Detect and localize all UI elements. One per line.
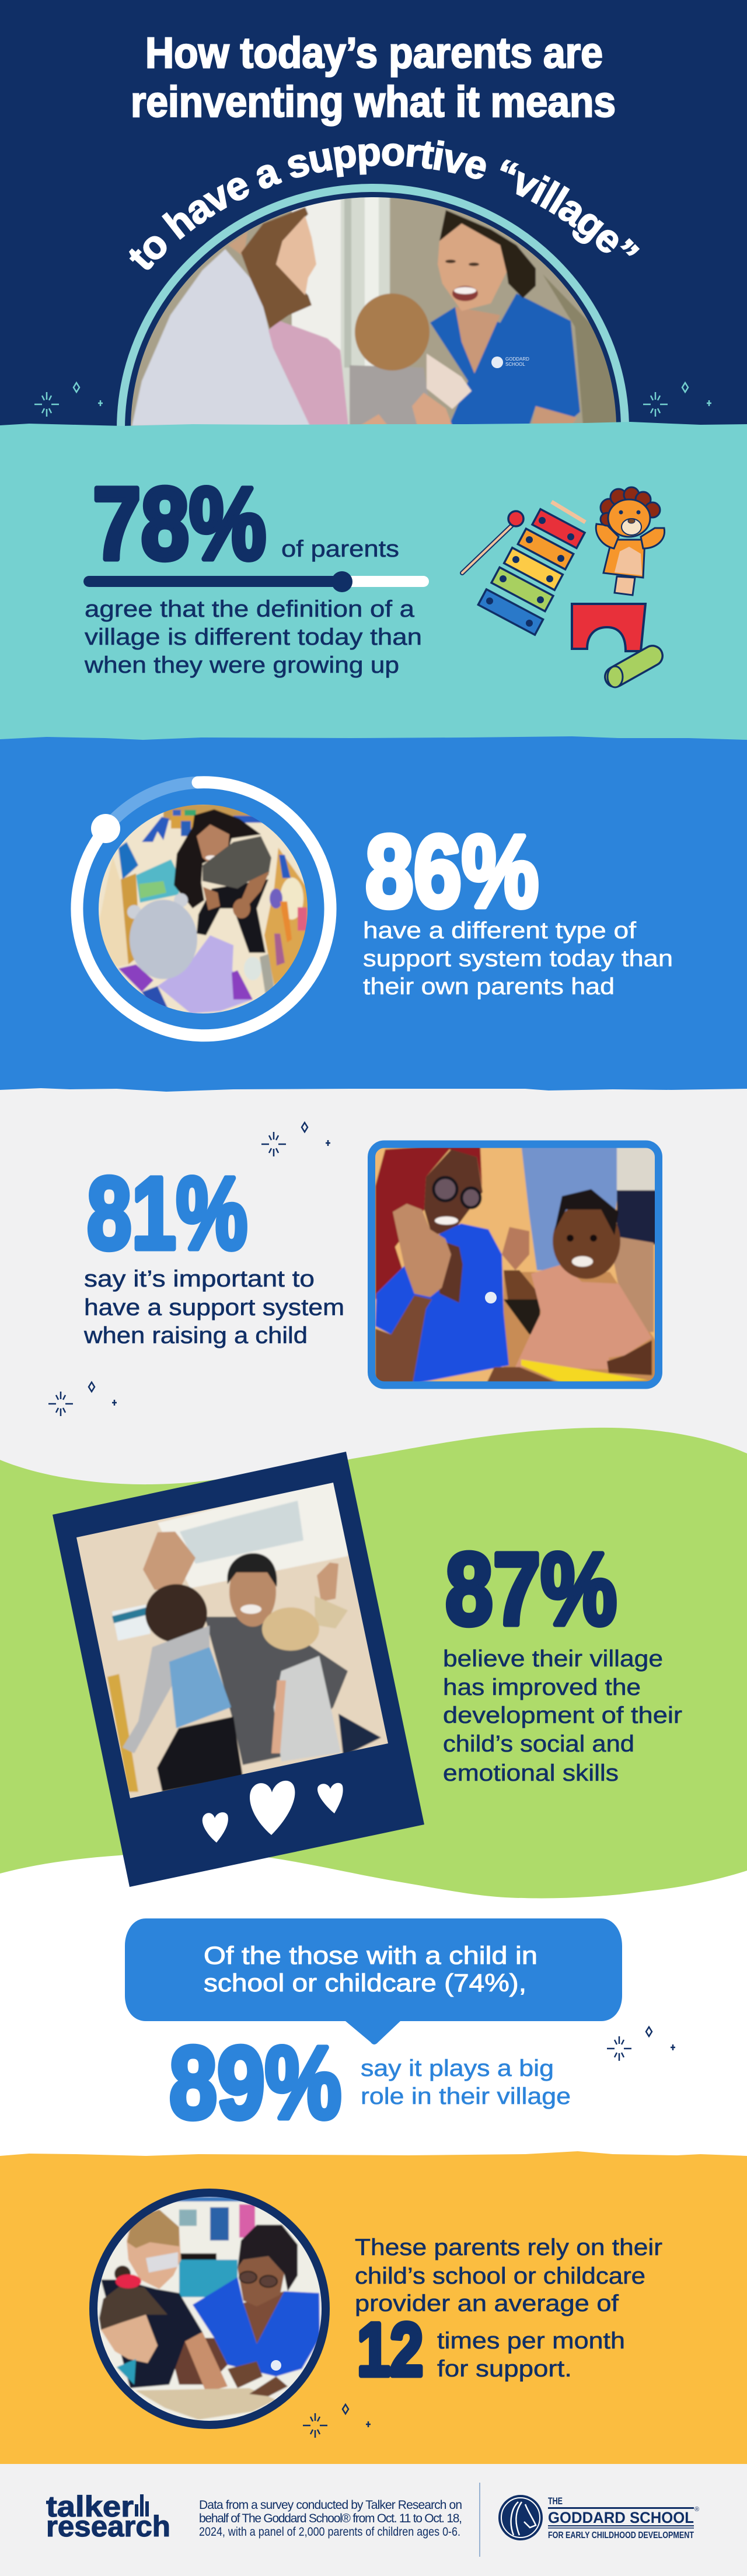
icon: sparkles top	[261, 1123, 330, 1156]
panel: 89 percent white section	[0, 1852, 747, 2170]
photo: parent, baby and teacher in arch	[128, 193, 619, 432]
speech bubble	[125, 1918, 622, 2044]
text: of parents: of parents	[281, 536, 399, 562]
text: times per month	[437, 2328, 625, 2382]
circle border	[93, 2193, 326, 2425]
icon: red arch block	[572, 604, 645, 651]
text: different support system: have a different type of	[363, 918, 637, 943]
icon: sparkles bottom	[48, 1382, 117, 1416]
text: plays a big role: role in their village	[361, 2084, 571, 2109]
text: important to have support: say it’s important to	[84, 1266, 315, 1292]
text: bubble copy	[204, 1942, 537, 1997]
logo: The Goddard School: GODDARD SCHOOL	[548, 2509, 694, 2526]
text: village improved development: has improved the	[443, 1675, 641, 1700]
photo: teacher high-fiving children	[70, 1476, 397, 1803]
shirt logo: GODDARD	[505, 356, 529, 362]
logo: The Goddard School: ®	[694, 2506, 699, 2513]
icon: small heart right	[317, 1783, 343, 1813]
text: rely on provider: child’s school or childcare	[355, 2263, 645, 2289]
stat: 89%: 89%	[169, 2026, 341, 2140]
panel: 87 percent green section	[0, 1428, 747, 1925]
text: important to have support: have a support system	[84, 1295, 344, 1320]
progress ring	[77, 782, 330, 1036]
text: different support system	[363, 918, 673, 999]
panel: 86 percent blue section	[0, 736, 747, 1109]
title: reinventing what it means	[131, 78, 616, 126]
logo: talker research: research	[46, 2510, 170, 2543]
polaroid frame with high-five photo	[53, 1452, 424, 1887]
stat: 12: 12	[357, 2308, 423, 2392]
text: village improved development: development of their	[443, 1703, 682, 1728]
icon: sparkles	[303, 2404, 371, 2438]
icon: lion puppet	[596, 487, 665, 595]
text: village improved development: believe their village	[443, 1646, 663, 1672]
text: bubble copy: school or childcare (74%),	[204, 1969, 526, 1997]
curved title line: to have a supportive “village”	[129, 140, 640, 270]
text: definition of a village: when they were growing up	[84, 652, 399, 678]
text: village improved development	[443, 1646, 682, 1786]
text: important to have support	[83, 1266, 344, 1348]
photo: teacher with two children in circle	[88, 2188, 333, 2433]
icon: sparkles left	[34, 383, 103, 417]
logo: talker research	[46, 2490, 170, 2543]
stat: 78%: 78%	[93, 467, 266, 581]
panel: footer	[0, 2464, 747, 2576]
logo: The Goddard School	[498, 2495, 699, 2540]
text: times per month: times per month	[437, 2328, 625, 2354]
icon: small heart left	[203, 1812, 228, 1843]
text: village improved development: child’s social and	[443, 1731, 634, 1757]
photo frame	[371, 1144, 658, 1385]
text: times per month: for support.	[437, 2356, 572, 2382]
logo: talker research: talker	[46, 2490, 134, 2523]
arch ring	[121, 188, 625, 429]
panel: 81 percent grey section	[0, 1088, 747, 1494]
text: different support system: support system today than	[363, 946, 673, 971]
text: survey source note: behalf of The Goddard School® from Oct. 11 to Oct. 18,	[199, 2512, 462, 2525]
text: rely on provider	[355, 2235, 662, 2316]
title: How today’s parents are	[145, 29, 603, 77]
shirt logo	[485, 1292, 497, 1303]
text: important to have support: when raising a child	[83, 1323, 308, 1348]
text: plays a big role: say it plays a big	[361, 2056, 554, 2081]
text: survey source note	[199, 2498, 462, 2539]
text: rely on provider: These parents rely on their	[355, 2235, 662, 2260]
shirt logo: SCHOOL	[505, 362, 525, 367]
text: definition of a village: village is different today than	[85, 624, 422, 650]
shirt logo	[491, 356, 529, 368]
icon: green cylinder	[608, 656, 652, 687]
stat: 86%: 86%	[365, 815, 539, 929]
title	[131, 29, 616, 126]
text: bubble copy: Of the those with a child in	[204, 1942, 537, 1970]
text: survey source note: Data from a survey conducted by Talker Research on	[199, 2498, 462, 2512]
panel: 78 percent teal section	[0, 422, 747, 759]
text: survey source note: 2024, with a panel of 2,000 parents of children ages 0-6.	[199, 2525, 460, 2539]
icon: xylophone and mallet	[462, 502, 585, 635]
panel: header background	[0, 0, 747, 443]
icon: horse crest	[498, 2495, 543, 2540]
text: definition of a village	[84, 596, 422, 678]
text: rely on provider: provider an average of	[355, 2291, 619, 2316]
text: definition of a village: agree that the definition of a	[85, 596, 415, 622]
stat: 81%: 81%	[87, 1156, 247, 1271]
progress bar	[83, 571, 429, 592]
icon: sparkles	[607, 2027, 675, 2061]
photo: teacher and toddler waving	[371, 1144, 659, 1386]
text: village improved development: emotional skills	[443, 1760, 619, 1786]
stat: 87%: 87%	[445, 1532, 617, 1647]
panel: yellow section	[0, 2151, 747, 2464]
shirt logo	[271, 2360, 281, 2371]
text: different support system: their own parents had	[363, 974, 615, 999]
photo: teacher greeting child in circle	[96, 802, 312, 1018]
logo: The Goddard School: THE	[548, 2495, 563, 2507]
icon: large heart	[250, 1781, 295, 1835]
text: plays a big role	[361, 2056, 571, 2109]
icon: sparkles right	[643, 383, 711, 417]
logo: The Goddard School: FOR EARLY CHILDHOOD DEVELOPMENT	[548, 2530, 694, 2540]
